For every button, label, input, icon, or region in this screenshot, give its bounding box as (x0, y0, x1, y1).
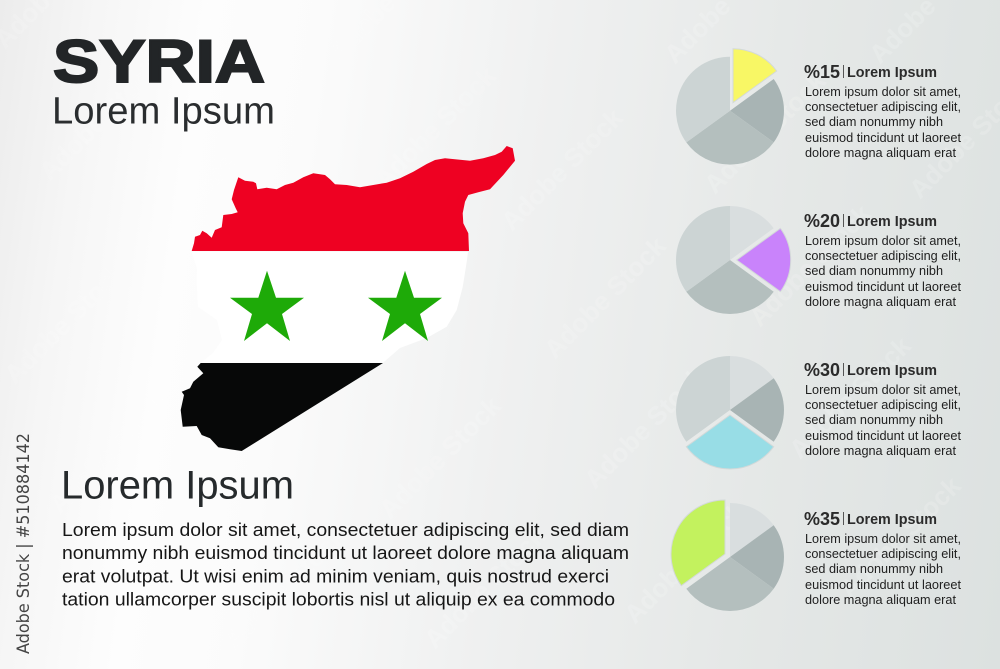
stock watermark pattern: Adobe Stock (163, 92, 297, 226)
text block: 35 percent (804, 509, 961, 607)
text block: 15 percent (804, 62, 961, 160)
stock watermark pattern: Adobe Stock (0, 255, 132, 389)
text block: 20 percent: dolore magna aliquam erat (805, 295, 956, 309)
pie chart: 30 percent (676, 356, 784, 469)
text block: 20 percent: %20 (804, 211, 840, 231)
stock watermark pattern: Adobe Stock (833, 470, 967, 604)
stock watermark pattern: Adobe Stock (43, 385, 177, 519)
text block: 30 percent: Lorem ipsum dolor sit amet, (805, 383, 961, 397)
main paragraph (62, 520, 629, 610)
stock watermark pattern: Adobe Stock (218, 520, 352, 654)
pie chart: 15 percent (676, 49, 784, 165)
text block: 20 percent: Lorem ipsum dolor sit amet, (805, 234, 961, 248)
text block: 20 percent: Lorem Ipsum (847, 214, 937, 230)
icon: green star right (368, 271, 442, 341)
main paragraph: erat volutpat. Ut wisi enim ad minim veniam, quis nostrud exerci (62, 567, 609, 587)
text block: 15 percent: Lorem ipsum dolor sit amet, (805, 85, 961, 99)
text block: 35 percent: dolore magna aliquam erat (805, 593, 956, 607)
text block: 35 percent: %35 (804, 509, 840, 529)
text block: 15 percent: sed diam nonummy nibh (805, 115, 943, 129)
text block: 15 percent: Lorem Ipsum (847, 65, 937, 81)
main paragraph: Lorem ipsum dolor sit amet, consectetuer adipiscing elit, sed diam (62, 520, 629, 540)
text block: 15 percent: %15 (804, 62, 840, 82)
text block: 35 percent: euismod tincidunt ut laoreet (805, 578, 961, 592)
main paragraph: tation ullamcorper suscipit lobortis nisl ut aliquip ex ea commodo (62, 590, 615, 610)
text block: 20 percent (804, 211, 961, 309)
pie chart: 35 percent (671, 500, 784, 611)
stock watermark pattern: Adobe Stock (698, 65, 832, 199)
text block: 30 percent: %30 (804, 360, 840, 380)
text block: 20 percent: consectetuer adipiscing elit, (805, 249, 961, 263)
stock watermark pattern: Adobe Stock (743, 198, 877, 332)
text block: 30 percent: sed diam nonummy nibh (805, 413, 943, 427)
stock watermark pattern: Adobe Stock (33, 52, 167, 186)
text block: 15 percent: dolore magna aliquam erat (805, 146, 956, 160)
icon: green star left (230, 271, 304, 341)
stock watermark pattern: Adobe Stock (418, 520, 552, 654)
text block: 30 percent: consectetuer adipiscing elit, (805, 398, 961, 412)
map: white band (192, 252, 468, 363)
text block: 15 percent: euismod tincidunt ut laoreet (805, 131, 961, 145)
text block: 30 percent: dolore magna aliquam erat (805, 444, 956, 458)
stock watermark pattern: Adobe Stock (538, 230, 672, 364)
text block: 35 percent: Lorem Ipsum (847, 512, 937, 528)
text block: 15 percent: consectetuer adipiscing elit, (805, 100, 961, 114)
text block: 35 percent: consectetuer adipiscing elit, (805, 547, 961, 561)
map: black band (181, 363, 383, 451)
stock watermark pattern: Adobe Stock (578, 360, 712, 494)
map of Syria with flag fill (181, 146, 515, 451)
map: red band (192, 146, 515, 251)
text block: 30 percent: euismod tincidunt ut laoreet (805, 429, 961, 443)
text block: 30 percent: Lorem Ipsum (847, 363, 937, 379)
text block: 35 percent: sed diam nonummy nibh (805, 562, 943, 576)
section heading: Lorem Ipsum (61, 464, 294, 508)
subtitle: Lorem Ipsum (52, 90, 275, 132)
text block: 20 percent: euismod tincidunt ut laoreet (805, 280, 961, 294)
stock watermark pattern: Adobe Stock (618, 495, 752, 629)
text block: 20 percent: sed diam nonummy nibh (805, 264, 943, 278)
stock watermark pattern: Adobe Stock (368, 60, 502, 194)
text block: 30 percent (804, 360, 961, 458)
main paragraph: nonummy nibh euismod tincidunt ut laoreet dolore magna aliquam (62, 543, 629, 563)
stock credit label: Adobe Stock | #510884142 (14, 433, 33, 654)
stock watermark pattern: Adobe Stock (373, 390, 507, 524)
stock watermark pattern: Adobe Stock (783, 330, 917, 464)
pie chart: 20 percent (676, 206, 791, 314)
title: SYRIA (53, 28, 265, 95)
text block: 35 percent: Lorem ipsum dolor sit amet, (805, 532, 961, 546)
stock watermark pattern: Adobe Stock (495, 102, 629, 236)
